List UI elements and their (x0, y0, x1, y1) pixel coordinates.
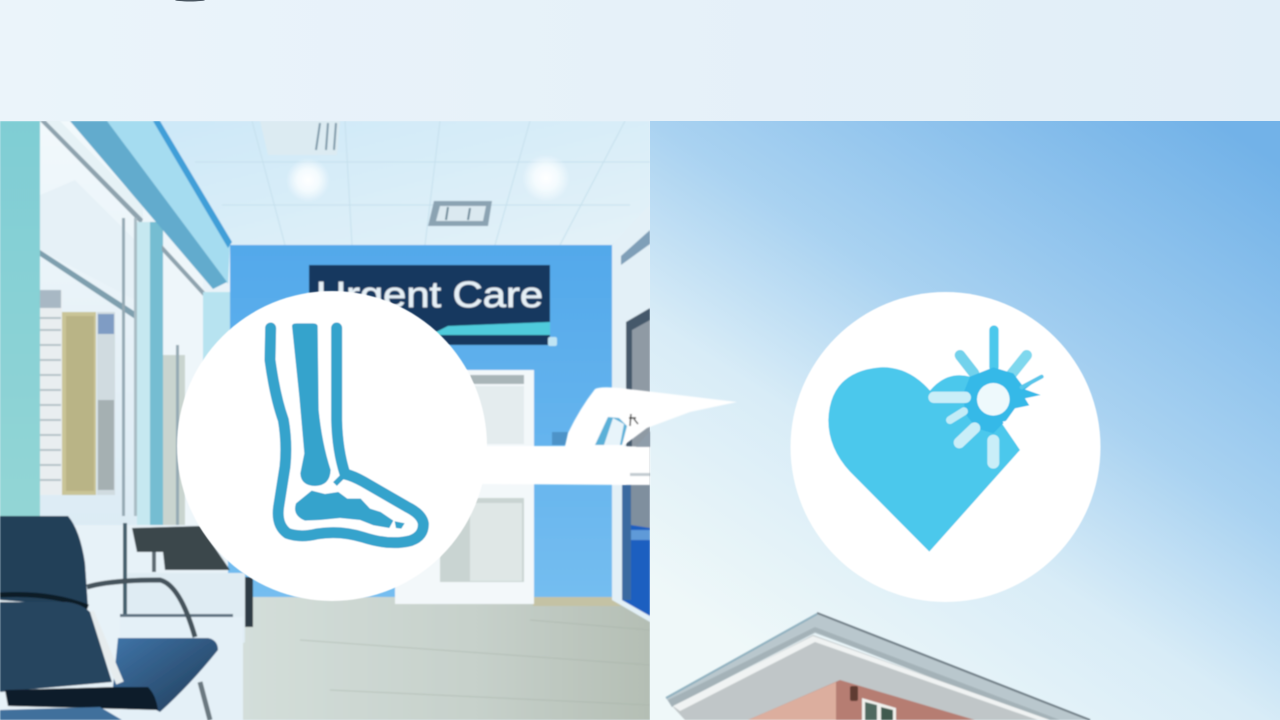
window (862, 698, 896, 720)
building roof (666, 613, 1090, 720)
floor (225, 597, 650, 720)
teal ceiling beam (70, 121, 227, 289)
back wall (228, 243, 616, 599)
waiting room chairs (0, 516, 218, 720)
sign: Urgent Care (309, 265, 557, 346)
sign: Urgent Care: Urgent Care (316, 274, 543, 315)
panel: emergency room sky and building (650, 121, 1280, 720)
light soffit above windows (105, 121, 230, 284)
brick wall (813, 680, 974, 720)
right wall and blue door (612, 205, 650, 622)
panel: urgent care clinic photo (0, 121, 650, 720)
side table and cabinet (120, 523, 253, 720)
lantern (850, 686, 858, 701)
callout arrow between panels (480, 387, 737, 485)
ceiling (155, 121, 650, 245)
icon: heart attack burst in white circle (790, 292, 1100, 602)
white door (395, 370, 568, 604)
window wall (40, 121, 230, 527)
teal pillar (0, 121, 40, 516)
sky background (650, 121, 1280, 720)
arrow inner cutout (595, 414, 650, 476)
top header band (0, 0, 1280, 121)
icon: ankle and foot bones in white circle (177, 291, 487, 601)
